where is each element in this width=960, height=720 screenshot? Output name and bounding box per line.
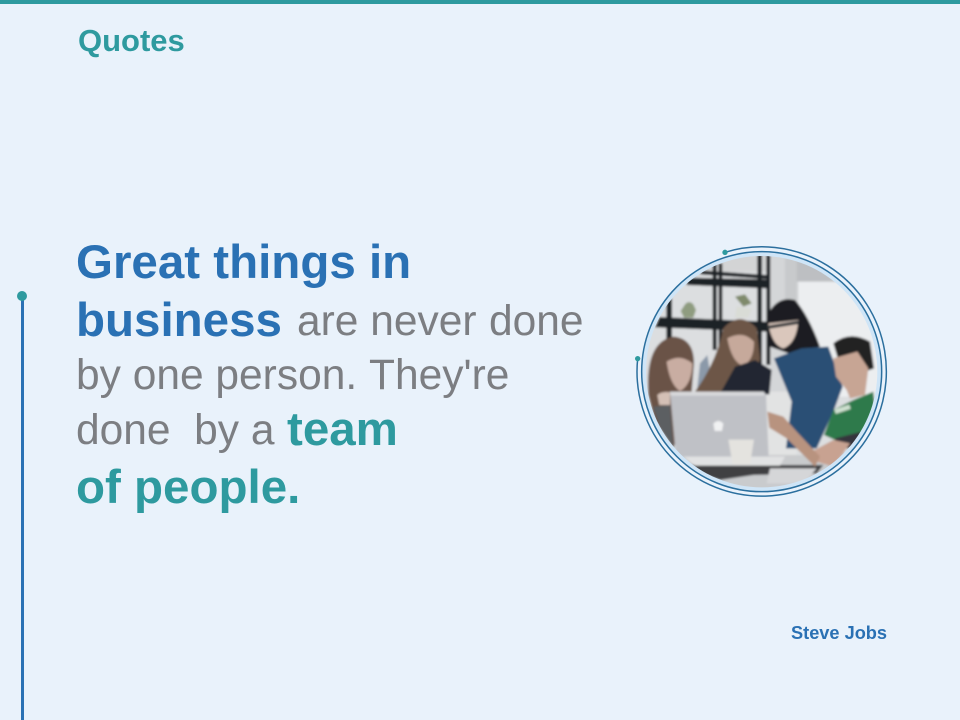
quote text: of people. — [76, 461, 300, 514]
woman left — [648, 337, 694, 448]
top bar — [0, 0, 960, 4]
laptop — [670, 392, 769, 457]
quote text: team — [287, 403, 398, 456]
woman centre — [695, 319, 772, 395]
quote text: Great things in — [76, 236, 411, 289]
arm — [767, 412, 820, 467]
title: Quotes — [78, 23, 185, 58]
woman right — [767, 299, 843, 448]
lower area — [767, 392, 797, 455]
quote text: done — [489, 298, 584, 345]
ring dots — [635, 250, 728, 361]
attribution: Steve Jobs — [791, 623, 887, 643]
quote text: by one person. — [76, 352, 357, 399]
photo ring band — [642, 252, 882, 492]
outer rings — [637, 247, 886, 496]
quote text: are never — [297, 298, 477, 345]
quote text: They're — [369, 352, 509, 399]
photo scene — [646, 256, 878, 488]
circular team photo — [635, 246, 888, 497]
vertical timeline line with dot — [17, 291, 27, 720]
quote text: done by a — [76, 407, 274, 454]
quote text — [76, 236, 584, 514]
man — [812, 336, 878, 467]
shelves — [655, 252, 770, 365]
quote text: business — [76, 294, 282, 347]
